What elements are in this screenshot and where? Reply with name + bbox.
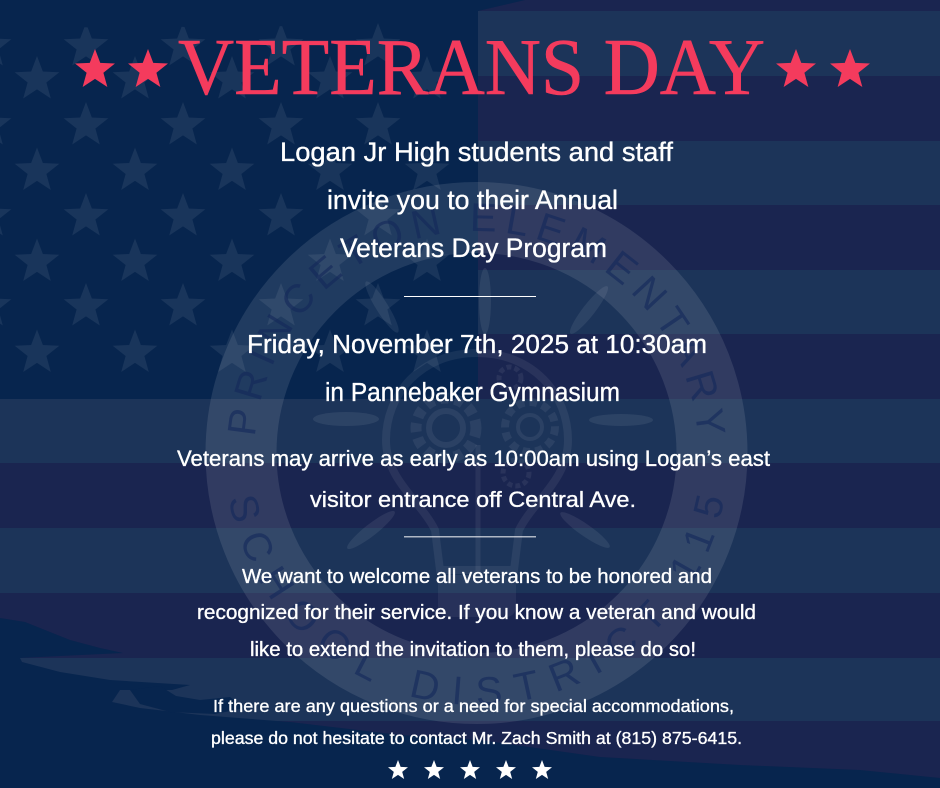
- arrival instructions: visitor entrance off Central Ave.: [310, 487, 636, 512]
- contact information: [211, 696, 742, 748]
- title row: [75, 24, 870, 112]
- arrival instructions: Veterans may arrive as early as 10:00am using Logan’s east: [177, 446, 771, 471]
- icon: light bulb with gears: [386, 353, 568, 617]
- icon: red stars right: [776, 49, 870, 87]
- contact information: please do not hesitate to contact Mr. Zach Smith at (815) 875-6415.: [211, 728, 742, 748]
- icon: bulb rays: [313, 268, 653, 553]
- icon: red stars left: [75, 49, 168, 87]
- title: VETERANS DAY: [178, 24, 765, 112]
- welcome message: [197, 565, 756, 661]
- date and location: [247, 331, 707, 407]
- flag canton stars: [0, 23, 449, 372]
- seal text: bottom arc: SCHOOL DISTRICT 115: [230, 496, 723, 705]
- contact information: If there are any questions or a need for special accommodations,: [213, 696, 734, 716]
- date and location: in Pannebaker Gymnasium: [325, 379, 620, 407]
- icon: white stars row: [388, 760, 552, 779]
- date and location: Friday, November 7th, 2025 at 10:30am: [247, 331, 707, 359]
- welcome message: recognized for their service. If you know a veteran and would: [197, 601, 756, 624]
- welcome message: like to extend the invitation to them, please do so!: [250, 638, 696, 661]
- arrival instructions: [177, 446, 771, 512]
- seal ring: [241, 218, 712, 688]
- school district seal watermark: [206, 182, 748, 724]
- invitation text: invite you to their Annual: [327, 185, 618, 215]
- invitation text: Veterans Day Program: [340, 233, 607, 263]
- invitation text: Logan Jr High students and staff: [280, 137, 674, 167]
- seal text: top arc: PRINCETON ELEMENTARY: [228, 204, 726, 434]
- divider: [404, 296, 536, 297]
- divider: [404, 536, 536, 538]
- welcome message: We want to welcome all veterans to be honored and: [242, 565, 712, 588]
- invitation text: [280, 137, 674, 263]
